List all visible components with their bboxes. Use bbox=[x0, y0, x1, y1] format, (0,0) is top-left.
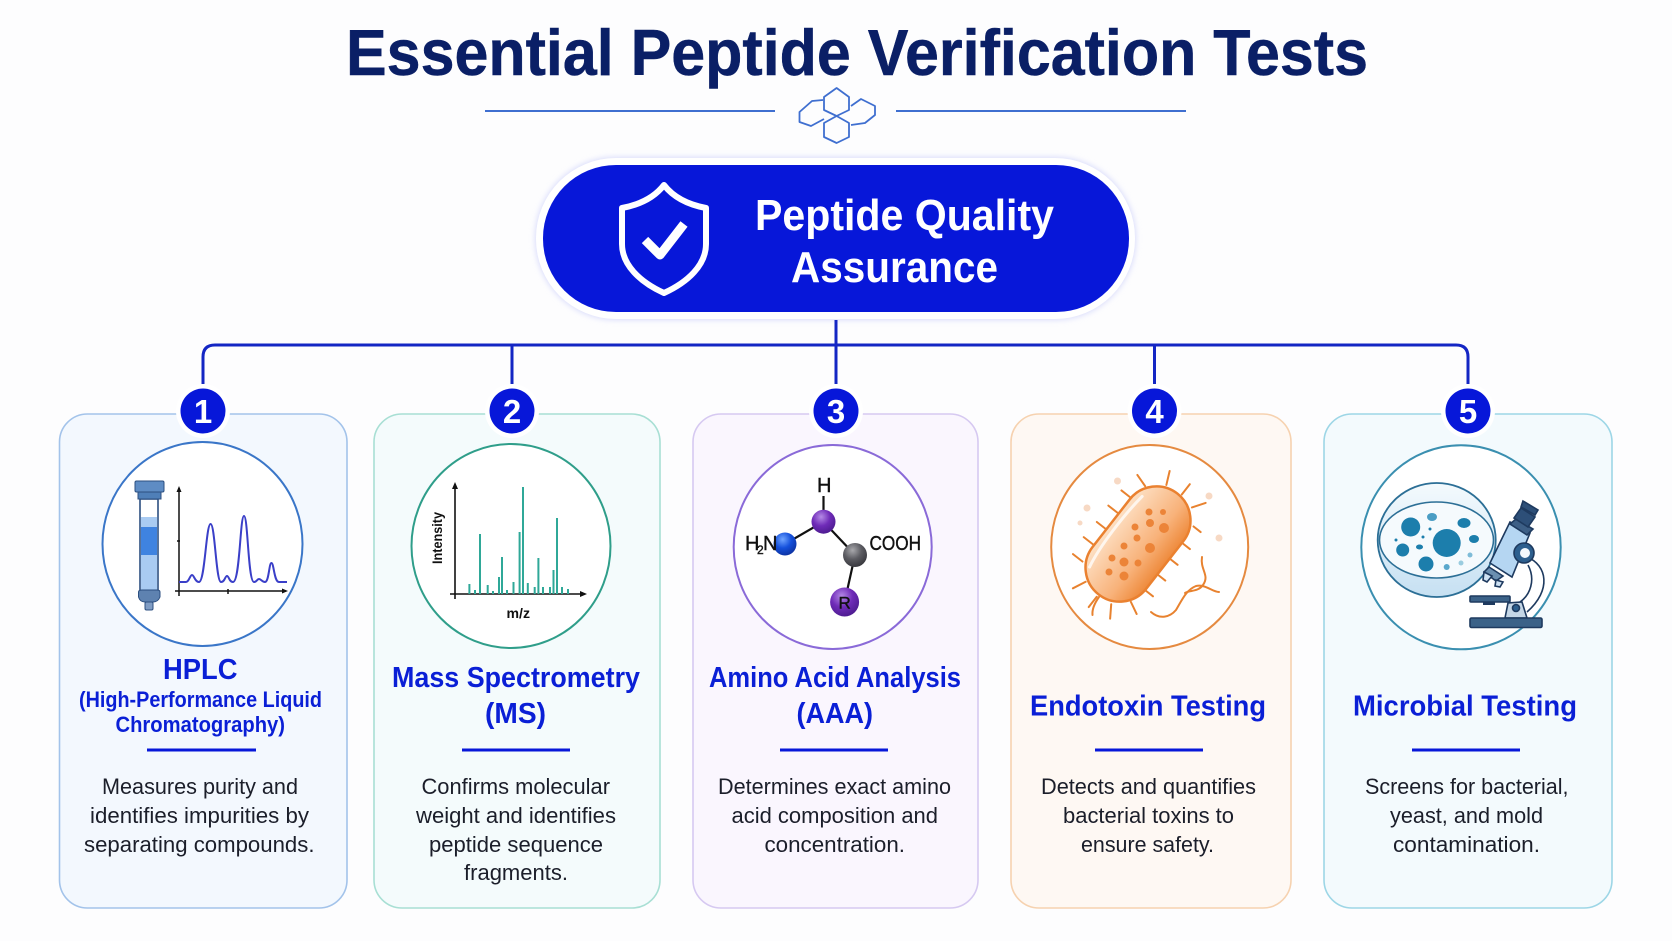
badge 3: 3 bbox=[827, 393, 845, 430]
description: Determines exact amino bbox=[718, 774, 951, 799]
icon: petri dish and microscope bbox=[1361, 445, 1561, 649]
icon: HPLC column and chromatogram bbox=[102, 442, 302, 646]
description: fragments. bbox=[464, 860, 568, 885]
icon: amino acid molecule: H bbox=[817, 475, 831, 497]
icon: mass spectrum: m/z bbox=[506, 605, 530, 621]
heading: (MS) bbox=[485, 698, 546, 730]
description bbox=[1041, 774, 1256, 857]
icon: amino acid molecule: H bbox=[745, 533, 759, 555]
badge 3 bbox=[809, 384, 863, 438]
description: yeast, and mold bbox=[1390, 803, 1543, 828]
description: acid composition and bbox=[732, 803, 938, 828]
icon: amino acid molecule: R bbox=[838, 594, 851, 612]
heading: Mass Spectrometry bbox=[392, 662, 640, 694]
icon: mass spectrum bbox=[412, 444, 610, 648]
heading: (AAA) bbox=[796, 698, 873, 730]
description: concentration. bbox=[764, 832, 905, 857]
badge 4: 4 bbox=[1145, 393, 1164, 430]
heading: HPLC bbox=[163, 654, 238, 686]
pill heading bbox=[755, 191, 1054, 292]
divider with molecule icon bbox=[485, 88, 1186, 143]
heading: Endotoxin Testing bbox=[1030, 690, 1266, 722]
description: bacterial toxins to bbox=[1063, 803, 1234, 828]
icon: hexagon molecule bbox=[800, 88, 875, 143]
panel: Mass Spectrometry bbox=[374, 384, 660, 908]
petri dish bbox=[1378, 483, 1496, 597]
connector tree bbox=[203, 320, 1468, 384]
heading: Chromatography) bbox=[116, 712, 285, 737]
icon: amino acid molecule: N bbox=[763, 533, 777, 555]
icon: amino acid molecule bbox=[734, 445, 932, 649]
icon: mass spectrum: Intensity bbox=[429, 512, 445, 564]
pill heading: Peptide Quality bbox=[755, 191, 1054, 240]
description: Confirms molecular bbox=[422, 774, 610, 799]
panel: Microbial Testing bbox=[1324, 384, 1612, 908]
badge 1 bbox=[176, 384, 230, 438]
badge 4 bbox=[1128, 384, 1182, 438]
description: Measures purity and bbox=[102, 774, 298, 799]
heading: Microbial Testing bbox=[1353, 690, 1577, 722]
pill heading: Assurance bbox=[791, 243, 998, 292]
panel: Amino Acid Analysis bbox=[693, 384, 978, 908]
description: contamination. bbox=[1393, 832, 1540, 857]
description bbox=[84, 774, 314, 857]
heading: (High-Performance Liquid bbox=[79, 687, 322, 712]
heading bbox=[709, 662, 961, 730]
description: ensure safety. bbox=[1081, 832, 1214, 857]
badge 2: 2 bbox=[503, 393, 521, 430]
description: Screens for bacterial, bbox=[1365, 774, 1568, 799]
icon: shield with check bbox=[622, 185, 706, 293]
central pill: Peptide Quality Assurance bbox=[535, 157, 1136, 320]
badge 5: 5 bbox=[1459, 393, 1477, 430]
icon: amino acid molecule: COOH bbox=[870, 533, 921, 555]
description bbox=[718, 774, 951, 857]
badge 5 bbox=[1441, 384, 1495, 438]
description: Detects and quantifies bbox=[1041, 774, 1256, 799]
title: Essential Peptide Verification Tests bbox=[346, 16, 1368, 89]
description bbox=[415, 774, 616, 885]
heading bbox=[392, 662, 640, 730]
description: peptide sequence bbox=[429, 832, 603, 857]
badge 1: 1 bbox=[194, 393, 212, 430]
panel: Endotoxin Testing bbox=[1011, 384, 1291, 908]
heading bbox=[79, 654, 322, 737]
panel: HPLC bbox=[60, 384, 347, 908]
icon: bacterium bbox=[1051, 445, 1248, 649]
icon: amino acid molecule: 2 bbox=[757, 543, 764, 557]
description: separating compounds. bbox=[84, 832, 314, 857]
heading: Amino Acid Analysis bbox=[709, 662, 961, 694]
description: weight and identifies bbox=[415, 803, 616, 828]
microscope bbox=[1470, 501, 1544, 628]
description: identifies impurities by bbox=[90, 803, 309, 828]
description bbox=[1365, 774, 1568, 857]
badge 2 bbox=[485, 384, 539, 438]
